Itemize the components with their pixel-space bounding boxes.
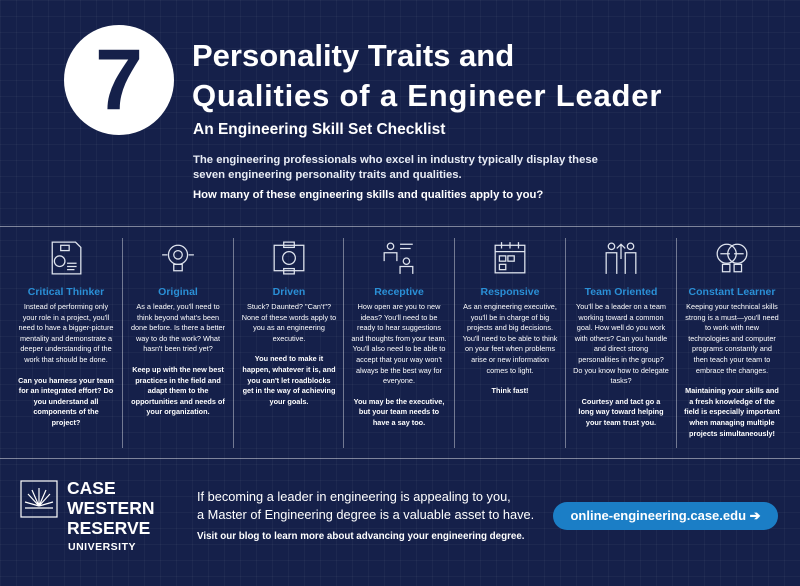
logo: case western reserve: UNIVERSITY <box>68 541 136 553</box>
panel: constant learner <box>684 244 780 438</box>
panel: constant learner: Constant Learner <box>689 286 775 298</box>
panel: team oriented: You'll be a leader on a team working toward a common goal. How well do you work with others? Can you handle and direct strong personalities in the group? Do you know how to delegate tasks? <box>573 302 669 385</box>
icon: bulbs <box>716 244 748 272</box>
panel: receptive <box>351 242 447 427</box>
panel: original: Keep up with the new best practices in the field and adapt them to the opportunities and needs of your organization. <box>131 365 225 416</box>
footer text: If becoming a leader in engineering is appealing to you, <box>197 489 511 504</box>
title <box>192 38 662 113</box>
icon: people <box>384 242 414 274</box>
panel: original: As a leader, you'll need to think beyond what's been done before. Is there a better way to do the work? What hasn't been tried yet? <box>131 302 225 353</box>
footer text <box>197 489 534 542</box>
button: website: online-engineering.case.edu ➔ <box>570 508 761 523</box>
icon: number 7 circle <box>64 25 174 135</box>
panel: responsive: Responsive <box>481 286 539 298</box>
footer text: a Master of Engineering degree is a valuable asset to have. <box>197 507 534 522</box>
panel: original: Original <box>158 286 198 298</box>
icon: number 7 circle: 7 <box>95 32 143 128</box>
panel: critical thinker: Instead of performing only your role in a project, you'll need to have a bigger-picture mentality and demonstrate a deeper understanding of the work that should be done. <box>19 302 113 364</box>
panel: team oriented: Courtesy and tact go a long way toward helping your team trust you. <box>578 397 664 427</box>
intro text: How many of these engineering skills and qualities apply to you? <box>193 189 543 201</box>
intro text: The engineering professionals who excel in industry typically display these <box>193 154 598 166</box>
panel: driven <box>242 242 336 406</box>
panel: responsive <box>462 242 558 395</box>
panel: driven: Driven <box>273 286 305 298</box>
panel: responsive: Think fast! <box>492 386 528 395</box>
panel: original <box>131 244 225 416</box>
subtitle: An Engineering Skill Set Checklist <box>193 121 445 138</box>
icon: lightbulb gear <box>162 244 194 272</box>
icon: calendar <box>494 242 526 274</box>
button: website <box>553 502 778 530</box>
panel: critical thinker: Can you harness your team for an integrated effort? Do you understand all components of the project? <box>18 376 114 427</box>
intro text <box>193 154 598 201</box>
logo: case western reserve: CASE <box>67 478 116 498</box>
logo: case western reserve <box>20 478 154 553</box>
icon: sunburst square <box>20 480 58 518</box>
panel: receptive: You may be the executive, but your team needs to have a say too. <box>354 397 444 427</box>
panel: constant learner: Keeping your technical skills strong is a must—you'll need to work with new technologies and computer programs constantly and then teach your team to embrace the changes. <box>685 302 779 375</box>
icon: flowchart document <box>52 242 82 274</box>
intro text: seven engineering personality traits and qualities. <box>193 169 462 181</box>
title: Personality Traits and <box>192 38 514 73</box>
footer text: Visit our blog to learn more about advancing your engineering degree. <box>197 531 525 542</box>
panel: critical thinker: Critical Thinker <box>28 286 104 298</box>
logo: case western reserve: WESTERN <box>67 498 154 518</box>
panel: driven: Stuck? Daunted? "Can't"? None of these words apply to you as an engineering executive. <box>242 302 336 343</box>
panel: team oriented <box>573 242 669 427</box>
panel: receptive: How open are you to new ideas? You'll need to be ready to hear suggestions and thoughts from your team. You'll also need to be able to accept that your way won't always be the best way for everyone. <box>351 302 447 385</box>
panel: driven: You need to make it happen, whatever it is, and you can't let roadblocks get in the way of achieving your goals. <box>242 354 336 406</box>
panel: responsive: As an engineering executive, you'll be in charge of big projects and big decisions. You'll need to be able to think on your feet when problems arise or new information comes to light. <box>463 302 557 375</box>
panel: critical thinker <box>18 242 114 427</box>
panel: constant learner: Maintaining your skills and a fresh knowledge of the field is especially important when managing multiple projects simultaneously! <box>684 386 780 438</box>
icon: team <box>606 242 636 274</box>
panel: team oriented: Team Oriented <box>585 286 657 298</box>
panel: receptive: Receptive <box>374 286 424 298</box>
logo: case western reserve: RESERVE <box>67 518 150 538</box>
title: Qualities of a Engineer Leader <box>192 78 662 113</box>
icon: gear diagram <box>274 242 304 274</box>
